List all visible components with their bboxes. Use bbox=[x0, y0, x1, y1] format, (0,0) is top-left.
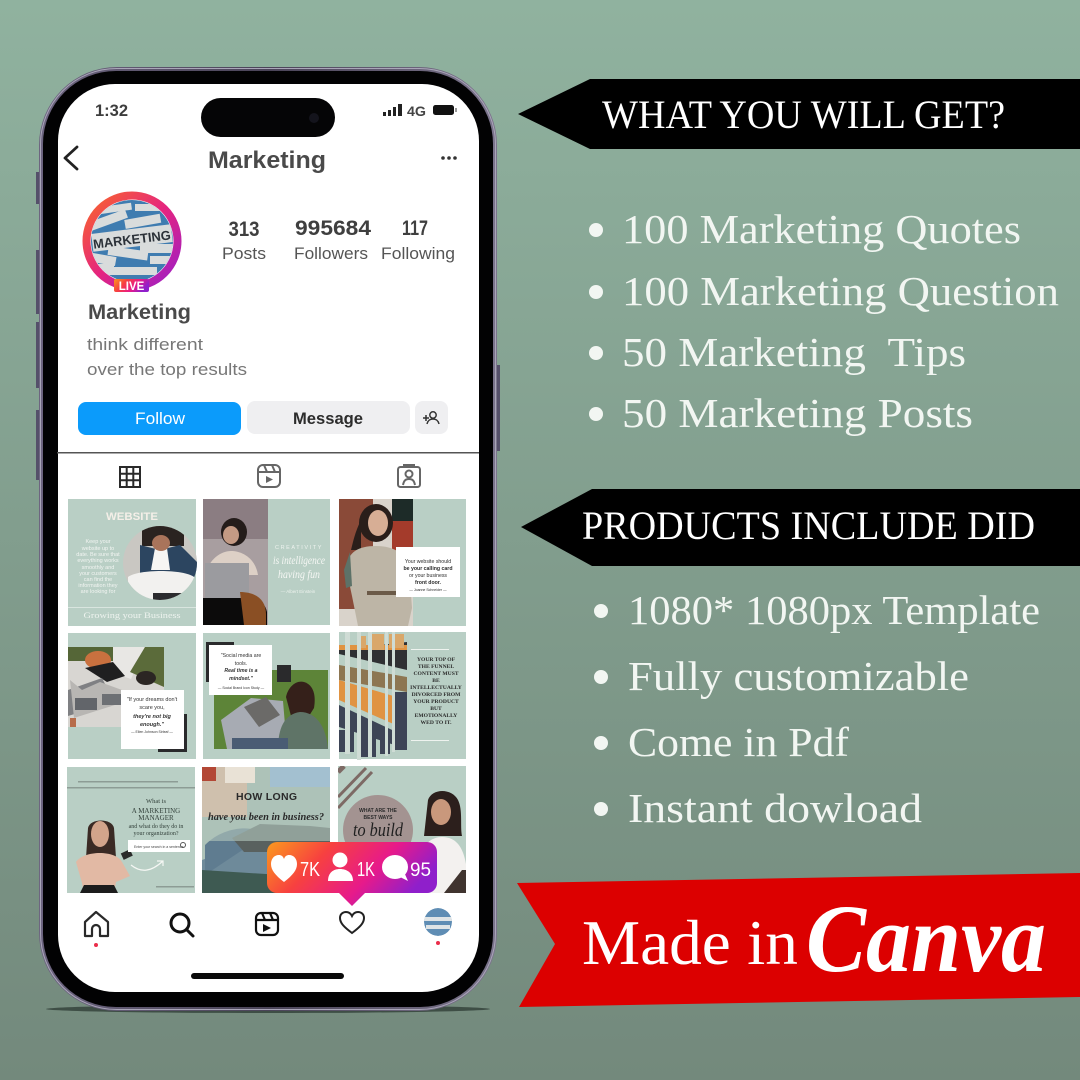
tab icons bbox=[120, 465, 420, 487]
buttons: Follow bbox=[135, 410, 185, 428]
bio: Marketing bbox=[88, 301, 191, 324]
tile: build audience: to build bbox=[353, 820, 403, 841]
tile: funnel: CONTENT MUST bbox=[413, 671, 459, 677]
tile: creativity bbox=[203, 499, 330, 625]
tile: funnel: THE FUNNEL bbox=[418, 664, 454, 670]
tile: build audience: BEST WAYS bbox=[364, 815, 393, 821]
tile: how long: have you been in business? bbox=[208, 812, 324, 823]
profile stats: Posts bbox=[222, 244, 266, 263]
tile: dreams quote: "If your dreams don't bbox=[127, 697, 178, 703]
icon: reels bbox=[256, 913, 278, 935]
tile: dreams quote: — Ellen Johnson Sirleaf — bbox=[131, 730, 173, 734]
tile: funnel: EMOTIONALLY bbox=[415, 713, 457, 719]
tile: marketing manager: Enter your search in a sentence bbox=[134, 845, 183, 849]
avatar: LIVE bbox=[119, 281, 145, 293]
icon: comment bbox=[382, 855, 408, 881]
list: products include: Fully customizable bbox=[628, 653, 969, 699]
back arrow bbox=[65, 147, 77, 169]
status bar: 4G bbox=[407, 103, 426, 119]
banner: made in canva: Made in bbox=[582, 908, 798, 978]
banner: what you will get bbox=[518, 79, 1080, 149]
tile: social media quote: Real time is a bbox=[224, 668, 258, 674]
tile: website quote: — Joanne Schneider — bbox=[409, 588, 447, 592]
tile: build audience: WHAT ARE THE bbox=[359, 808, 398, 814]
tile: funnel: WED TO IT. bbox=[421, 720, 452, 726]
bottom navigation bbox=[85, 908, 452, 979]
tile: website: information they bbox=[78, 583, 118, 589]
tile: creativity: — Albert Einstein bbox=[281, 589, 316, 594]
live badge bbox=[114, 279, 149, 292]
tile: website quote: front door. bbox=[415, 580, 442, 586]
icon: reels bbox=[258, 465, 280, 487]
tile: social media quote: mindset." bbox=[229, 676, 253, 682]
tile: social media quote: tools. bbox=[235, 661, 247, 667]
buttons bbox=[78, 401, 448, 435]
banner: made in canva: Canva bbox=[806, 885, 1046, 992]
list: what you will get: 100 Marketing Question bbox=[622, 268, 1059, 314]
banner: products include bbox=[521, 489, 1080, 566]
like notification bubble bbox=[267, 842, 437, 906]
tile: funnel: BUT bbox=[430, 706, 442, 712]
tile: website: date. Be sure that bbox=[76, 552, 120, 558]
profile stats: 995684 bbox=[295, 217, 371, 240]
tile: marketing manager: and what do they do in bbox=[129, 824, 183, 830]
tile: website: website up to bbox=[81, 546, 114, 552]
list: products include: Instant dowload bbox=[628, 785, 922, 831]
tile: website: WEBSITE bbox=[106, 511, 158, 523]
list: what you will get: 50 Marketing Tips bbox=[622, 329, 966, 375]
status bar: 1:32 bbox=[95, 101, 128, 120]
avatar bbox=[86, 196, 178, 293]
profile stats: Following bbox=[381, 244, 455, 263]
icon: grid bbox=[120, 467, 140, 487]
tile: social media quote: — Social Brand Icon Study — bbox=[218, 686, 265, 690]
dynamic island bbox=[201, 98, 335, 137]
tile: marketing manager: your organization? bbox=[133, 831, 179, 837]
tile: funnel: YOUR PRODUCT bbox=[413, 699, 459, 705]
signal bbox=[383, 104, 402, 116]
tile: marketing manager: What is bbox=[146, 798, 166, 805]
avatar: MARKETING bbox=[92, 227, 172, 252]
phone shadow bbox=[46, 1005, 490, 1013]
icon: home bbox=[85, 912, 108, 936]
profile stats bbox=[222, 217, 455, 263]
tile: funnel: INTELLECTUALLY bbox=[410, 685, 462, 691]
tile: website bbox=[68, 499, 200, 626]
tile: how long: HOW LONG bbox=[236, 791, 297, 803]
list: what you will get bbox=[589, 206, 1059, 436]
profile stats: Followers bbox=[294, 244, 368, 263]
battery bbox=[433, 105, 454, 115]
list: what you will get: 100 Marketing Quotes bbox=[622, 206, 1021, 252]
tile: social media quote: "Social media are bbox=[221, 653, 261, 659]
header bbox=[65, 147, 457, 174]
tile: funnel: DIVORCED FROM bbox=[412, 692, 461, 698]
tile: website: can find the bbox=[84, 577, 112, 583]
tile: social media quote bbox=[203, 633, 330, 759]
tile: funnel: YOUR TOP OF bbox=[417, 657, 456, 663]
list: what you will get: 50 Marketing Posts bbox=[622, 390, 973, 436]
icon: search bbox=[171, 914, 193, 936]
tile: website: everything works bbox=[77, 558, 119, 564]
bio bbox=[87, 301, 247, 379]
list: products include: Come in Pdf bbox=[628, 719, 849, 765]
tile: build audience bbox=[338, 766, 468, 893]
tile: marketing manager bbox=[67, 767, 195, 893]
tile: dreams quote: they're not big bbox=[133, 714, 171, 720]
list: products include: 1080* 1080px Template bbox=[628, 587, 1040, 633]
icon: person bbox=[328, 852, 353, 881]
icon: add user bbox=[423, 412, 439, 424]
tile: website quote: Your website should bbox=[405, 559, 451, 565]
header: Marketing bbox=[208, 147, 326, 174]
profile stats: 313 bbox=[228, 218, 260, 241]
tile: website: Keep your bbox=[85, 539, 111, 545]
banner: what you will get: WHAT YOU WILL GET? bbox=[602, 92, 1005, 137]
tile: marketing manager: A MARKETING bbox=[132, 807, 180, 815]
tile: website quote bbox=[339, 499, 466, 626]
icon: tagged bbox=[398, 465, 420, 487]
tile: website quote: or your business bbox=[409, 573, 447, 579]
post grid bbox=[67, 499, 468, 893]
tile: dreams quote: enough." bbox=[140, 722, 164, 728]
bio: over the top results bbox=[87, 360, 247, 379]
status bar bbox=[95, 98, 457, 137]
buttons: Message bbox=[293, 410, 363, 428]
tile: how long bbox=[202, 767, 330, 893]
list: products include bbox=[594, 587, 1040, 831]
banner: made in canva bbox=[517, 873, 1080, 1007]
tile: funnel: BE bbox=[432, 678, 440, 684]
tile: dreams quote: scare you, bbox=[139, 705, 165, 711]
tile: funnel bbox=[339, 632, 466, 760]
like notification bubble: 95 bbox=[410, 860, 431, 881]
tile: website: Growing your Business bbox=[84, 610, 180, 620]
like notification bubble: 7K bbox=[300, 859, 321, 881]
tile: marketing manager: MANAGER bbox=[138, 814, 174, 822]
bio: think different bbox=[87, 335, 203, 354]
profile thumbnail bbox=[424, 908, 452, 936]
profile stats: 117 bbox=[402, 217, 428, 240]
tile: creativity: having fun bbox=[278, 567, 320, 581]
tile: website: smoothly and bbox=[82, 565, 114, 571]
tile: website: are looking for bbox=[81, 589, 116, 595]
phone bbox=[36, 67, 500, 1013]
menu dots bbox=[441, 156, 457, 160]
tile: creativity: CREATIVITY bbox=[275, 545, 323, 551]
tile: website: your customers bbox=[79, 571, 117, 577]
icon: heart bbox=[271, 855, 297, 882]
like notification bubble: 1K bbox=[357, 859, 375, 881]
tile: creativity: is intelligence bbox=[273, 553, 326, 567]
icon: heart outline bbox=[340, 912, 364, 933]
phone frame bbox=[39, 67, 497, 1011]
home indicator bbox=[191, 973, 344, 979]
side buttons bbox=[36, 172, 500, 480]
tile: website quote: be your calling card bbox=[403, 566, 453, 572]
screen bbox=[58, 84, 479, 992]
banner: products include: PRODUCTS INCLUDE DID bbox=[582, 503, 1035, 548]
tile: dreams quote bbox=[68, 633, 196, 759]
